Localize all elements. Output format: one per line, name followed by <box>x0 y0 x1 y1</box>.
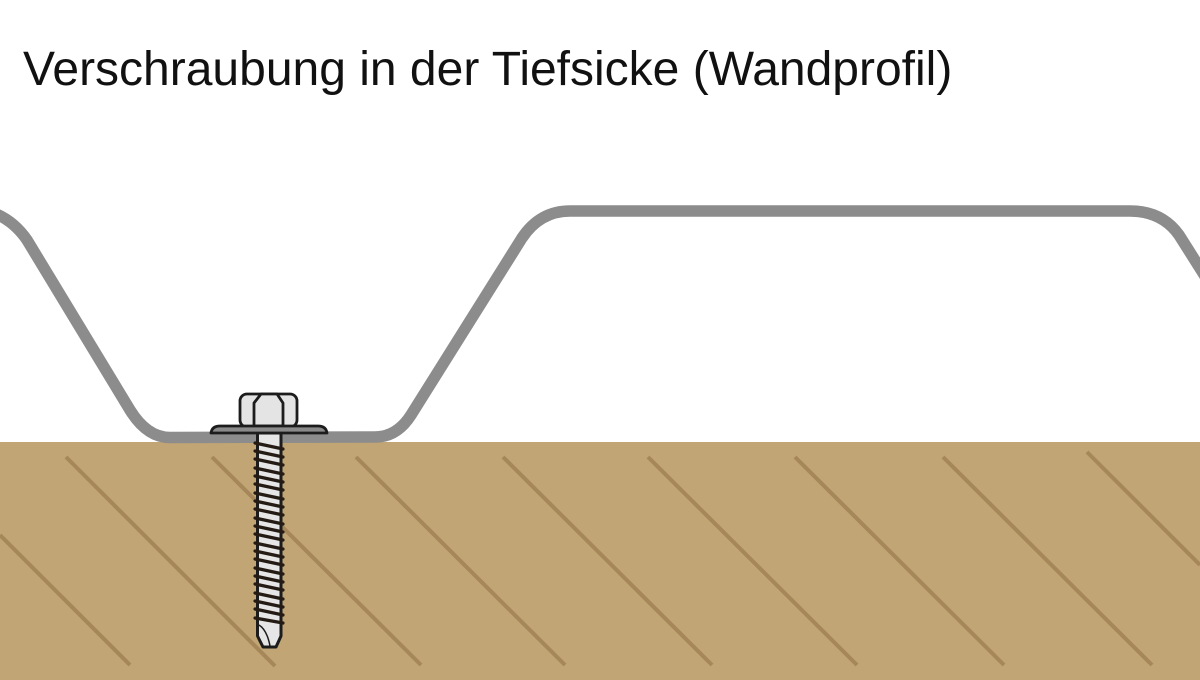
wall profile sheet <box>0 211 1200 438</box>
wood substrate <box>0 442 1200 680</box>
drill tip <box>259 625 270 646</box>
screw shank <box>258 433 281 647</box>
hex head <box>240 394 297 427</box>
screw <box>211 394 327 647</box>
screw thread <box>255 443 283 623</box>
washer <box>211 426 327 433</box>
title: Verschraubung in der Tiefsicke (Wandprofil) <box>23 43 952 96</box>
